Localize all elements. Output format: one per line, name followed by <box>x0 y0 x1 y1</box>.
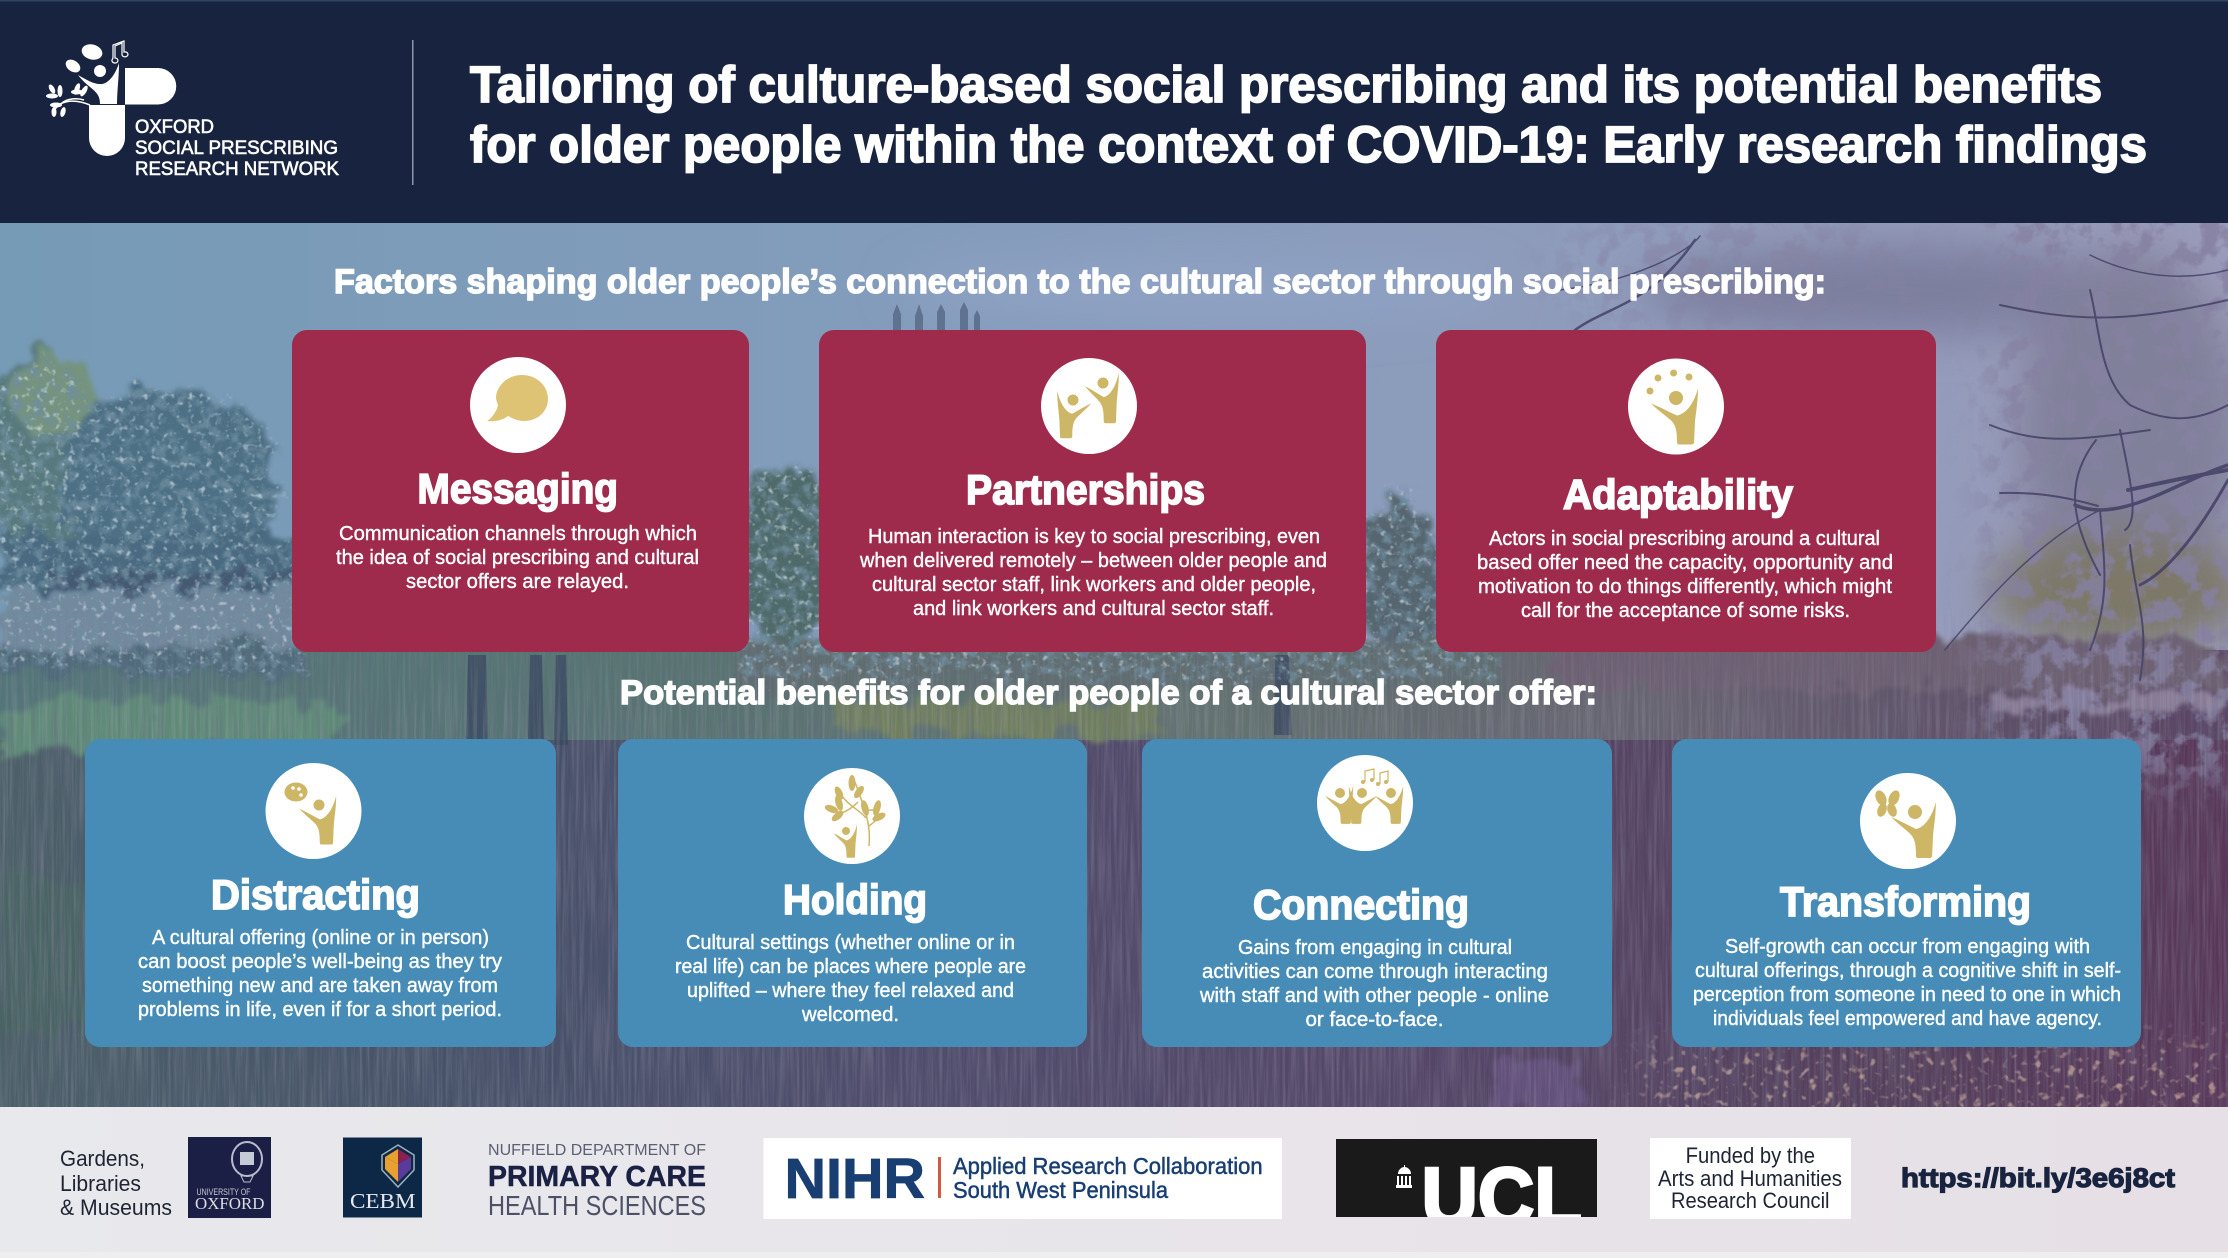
logo: Nuffield Department of Primary Care Health Sciences: NUFFIELD DEPARTMENT OF <box>488 1142 706 1159</box>
body text: perception from someone in need to one in which <box>1693 983 2121 1006</box>
heading: Transforming <box>1780 878 2031 925</box>
body text: Communication channels through which <box>339 522 697 545</box>
logo text: Gardens, Libraries & Museums: Gardens, <box>60 1146 145 1171</box>
body text: problems in life, even if for a short period. <box>138 998 502 1021</box>
body text: cultural offerings, through a cognitive shift in self- <box>1695 959 2121 982</box>
body text <box>859 525 1327 620</box>
icon: figure under tree <box>804 768 900 864</box>
body text: can boost people’s well-being as they try <box>138 950 503 973</box>
panel: Holding <box>618 739 1087 1047</box>
body text: the idea of social prescribing and cultural <box>336 546 699 569</box>
logo: University of Oxford <box>188 1137 271 1218</box>
logo: Nuffield Department of Primary Care Health Sciences: HEALTH SCIENCES <box>488 1190 706 1221</box>
body text: real life) can be places where people are <box>675 955 1026 978</box>
body text: welcomed. <box>801 1003 899 1026</box>
body text <box>1199 936 1549 1031</box>
icon: figure with palette <box>266 763 362 859</box>
body text: when delivered remotely – between older people and <box>859 549 1327 572</box>
body text: Gains from engaging in cultural <box>1238 936 1512 959</box>
body text: call for the acceptance of some risks. <box>1521 599 1850 622</box>
logo: NIHR Applied Research Collaboration: NIHR <box>784 1147 925 1211</box>
logo: University of Oxford: UNIVERSITY OF <box>196 1187 251 1198</box>
decorative spires on the horizon <box>893 302 980 330</box>
body text: or face-to-face. <box>1306 1008 1444 1031</box>
logo wordmark <box>135 117 339 180</box>
logo text: Funded by the Arts and Humanities Research Council: Arts and Humanities <box>1658 1166 1842 1191</box>
heading: Holding <box>783 876 927 923</box>
logo text: Gardens, Libraries & Museums <box>60 1146 172 1220</box>
body text <box>1477 527 1893 622</box>
footer band with partner logos <box>0 1107 2228 1258</box>
logo: University of Oxford: OXFORD <box>195 1194 264 1213</box>
logo: UCL <box>1336 1139 1597 1217</box>
body text: based offer need the capacity, opportunity and <box>1477 551 1893 574</box>
body text: A cultural offering (online or in person) <box>152 926 489 949</box>
icon: two figures reaching <box>1041 358 1137 454</box>
body text <box>336 522 699 593</box>
body text <box>675 931 1026 1026</box>
heading: Partnerships <box>966 466 1205 513</box>
body text: uplifted – where they feel relaxed and <box>687 979 1014 1002</box>
logo: NIHR Applied Research Collaboration <box>764 1138 1282 1219</box>
logo: UCL: UCL <box>1422 1150 1582 1243</box>
panel: Adaptability <box>1436 330 1936 652</box>
panel: Distracting <box>85 739 556 1047</box>
icon: figure with juggling dots <box>1628 358 1724 454</box>
logo: CEBM <box>343 1138 422 1218</box>
body text: Actors in social prescribing around a cultural <box>1489 527 1880 550</box>
heading: Connecting <box>1253 881 1469 928</box>
heading: Adaptability <box>1563 471 1794 518</box>
decorative reeds in foreground <box>466 655 1292 745</box>
body text: with staff and with other people - online <box>1199 984 1549 1007</box>
heading: Distracting <box>211 871 420 918</box>
heading: Messaging <box>418 465 618 512</box>
link: https://bit.ly/3e6j8ct <box>1901 1163 2175 1193</box>
logo text: Gardens, Libraries & Museums: Libraries <box>60 1171 141 1196</box>
logo: Oxford Social Prescribing Research Network <box>46 41 339 180</box>
logo: CEBM: CEBM <box>350 1189 416 1213</box>
logo wordmark: OXFORD <box>135 117 214 138</box>
panel: Transforming <box>1672 739 2141 1047</box>
logo: Nuffield Department of Primary Care Health Sciences <box>488 1142 706 1221</box>
logo wordmark: RESEARCH NETWORK <box>135 159 339 180</box>
body text: individuals feel empowered and have agency. <box>1713 1007 2102 1030</box>
main title: for older people within the context of COVID-19: Early research findings <box>470 116 2147 173</box>
logo: Nuffield Department of Primary Care Health Sciences: PRIMARY CARE <box>488 1161 706 1193</box>
logo text: Funded by the Arts and Humanities Research Council: Research Council <box>1671 1188 1830 1213</box>
panel: Partnerships <box>819 330 1366 652</box>
logo text: Funded by the Arts and Humanities Research Council <box>1650 1138 1851 1219</box>
body text <box>1693 935 2121 1030</box>
body text <box>138 926 503 1021</box>
icon: figure with butterfly <box>1860 773 1956 869</box>
body text: Self-growth can occur from engaging with <box>1725 935 2090 958</box>
body text: cultural sector staff, link workers and older people, <box>872 573 1316 596</box>
logo: NIHR Applied Research Collaboration: Applied Research Collaboration <box>953 1153 1263 1179</box>
icon: three figures with music notes <box>1317 755 1413 851</box>
logo mark: capsule with figure, leaves and note <box>46 41 176 156</box>
body text: something new and are taken away from <box>142 974 498 997</box>
body text: motivation to do things differently, which might <box>1478 575 1892 598</box>
section heading: benefits: Potential benefits for older people of a cultural sector offer: <box>620 674 1597 712</box>
body text: Cultural settings (whether online or in <box>686 931 1015 954</box>
logo text: Gardens, Libraries & Museums: & Museums <box>60 1195 172 1220</box>
body text: and link workers and cultural sector staff. <box>913 597 1274 620</box>
panel: Connecting <box>1142 739 1612 1047</box>
panel: Messaging <box>292 330 749 652</box>
section heading: factors: Factors shaping older people’s connection to the cultural sector through social prescribing: <box>334 263 1826 301</box>
logo text: Funded by the Arts and Humanities Research Council: Funded by the <box>1686 1143 1815 1168</box>
body text: activities can come through interacting <box>1202 960 1548 983</box>
body text: sector offers are relayed. <box>406 570 629 593</box>
logo wordmark: SOCIAL PRESCRIBING <box>135 138 338 159</box>
icon: speech bubble <box>470 357 566 453</box>
background photo: botanic garden with violet wash <box>0 223 2228 1113</box>
main title: Tailoring of culture-based social prescribing and its potential benefits <box>470 56 2102 113</box>
logo: NIHR Applied Research Collaboration: South West Peninsula <box>953 1177 1169 1203</box>
main title <box>470 56 2147 173</box>
header band <box>0 0 2228 223</box>
body text: Human interaction is key to social prescribing, even <box>868 525 1320 548</box>
